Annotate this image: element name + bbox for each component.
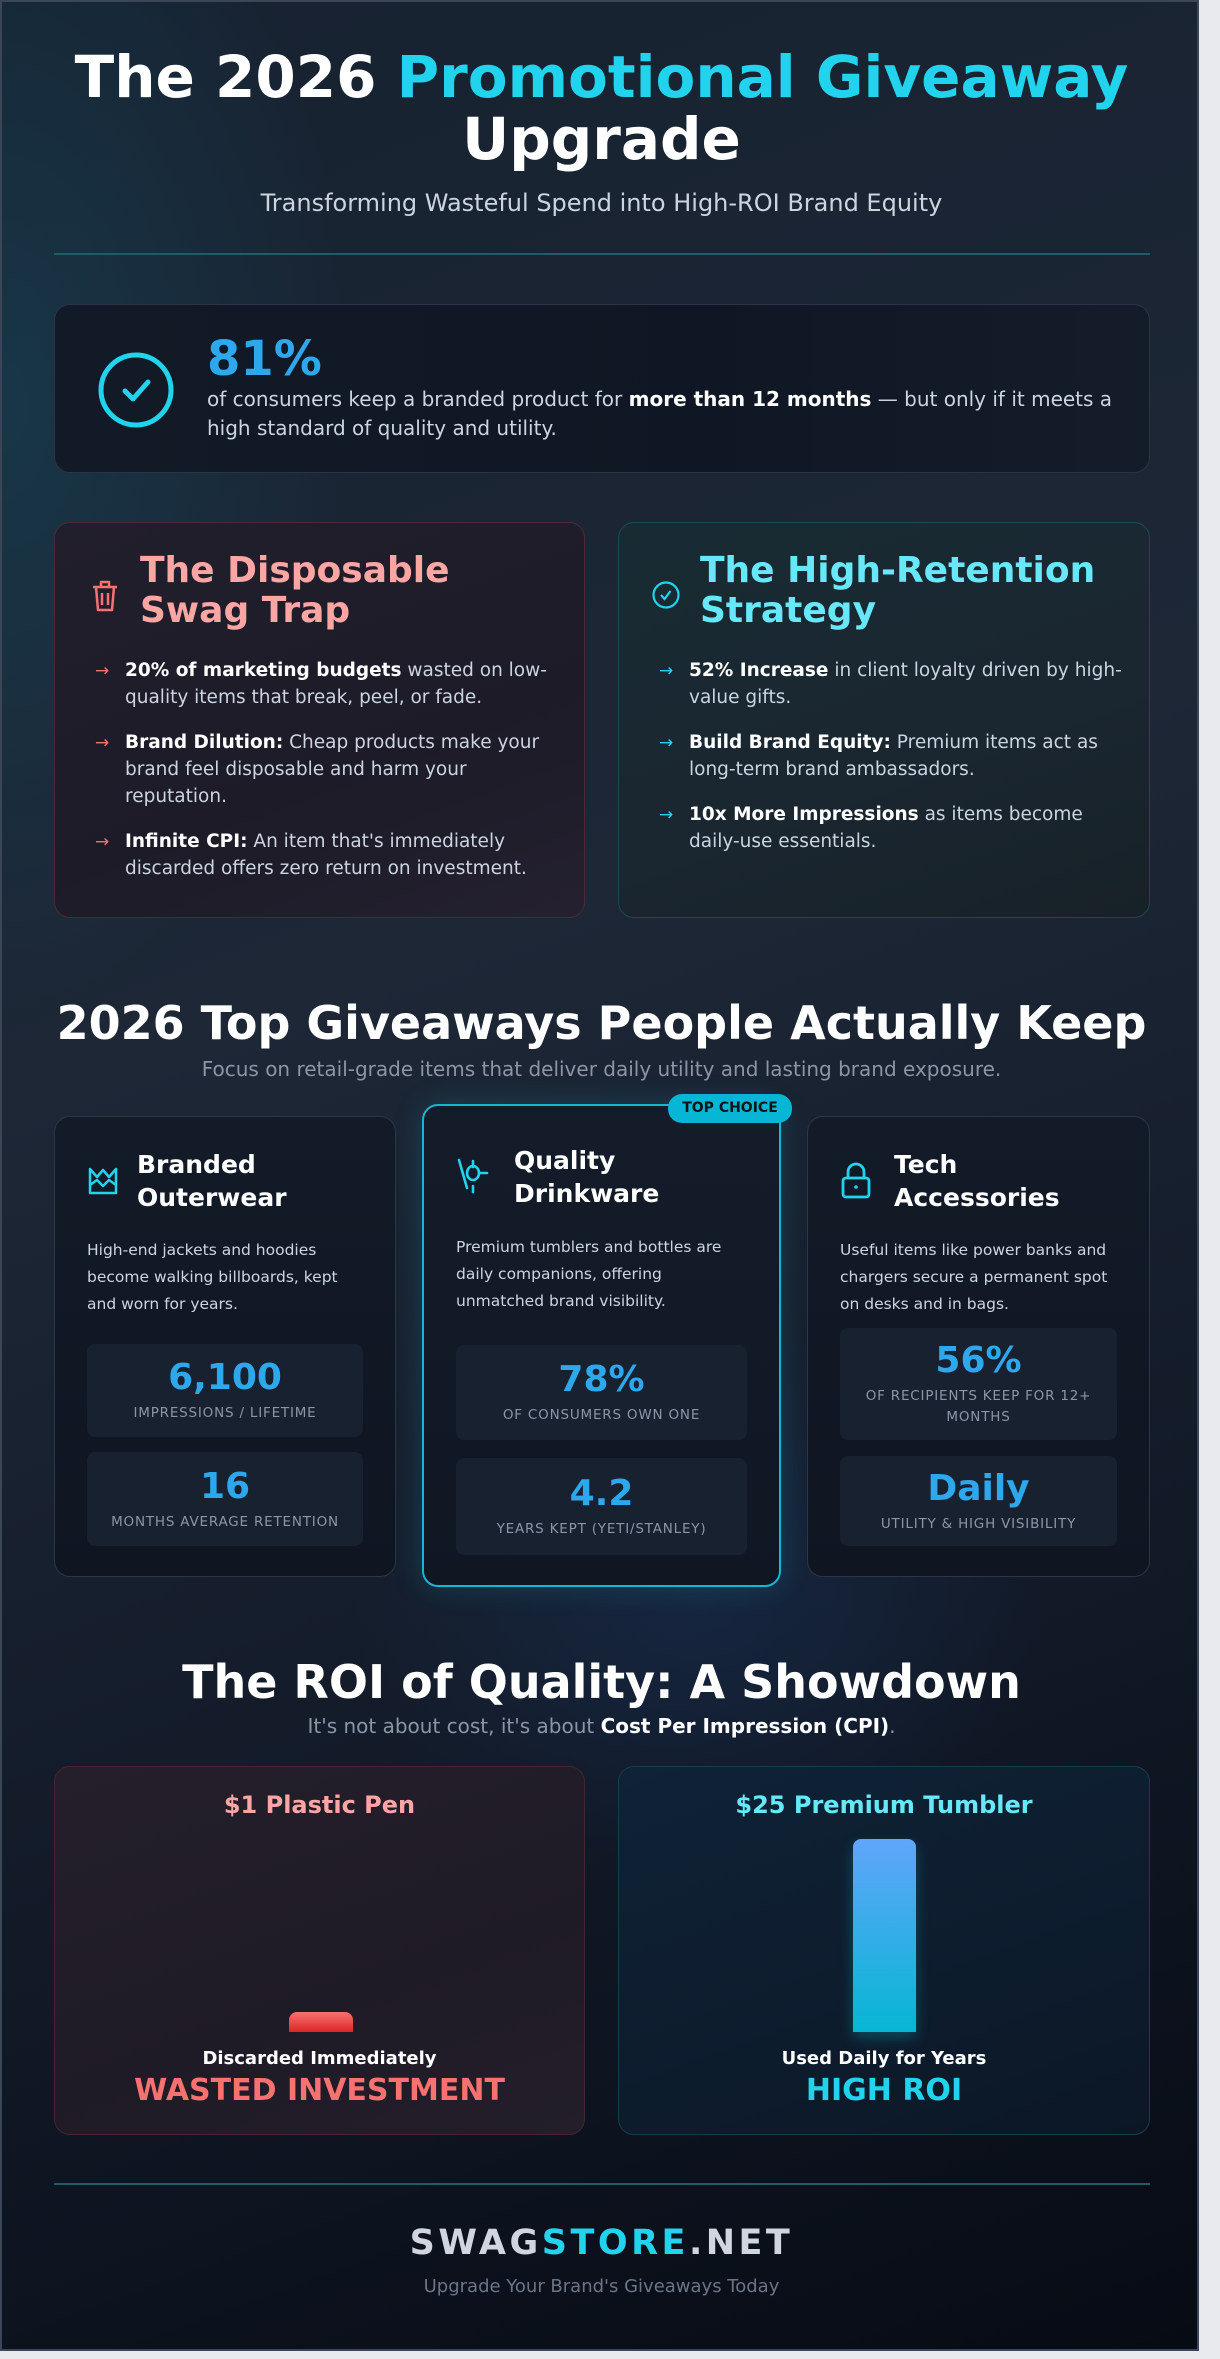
bullet 1: 52% Increase in client loyalty driven by high-value gifts. xyxy=(689,660,1122,708)
stat: 16 xyxy=(87,1452,363,1546)
stat: 56%: 56% xyxy=(935,1340,1022,1381)
bullet 3: → xyxy=(95,832,109,852)
bar: pen xyxy=(289,2012,353,2032)
stat: daily: Daily xyxy=(927,1468,1030,1508)
stat: 16: 16 xyxy=(200,1466,250,1506)
stat: daily xyxy=(840,1456,1117,1546)
stat: 78%: 78% xyxy=(558,1359,645,1400)
title: The 2026 Promotional Giveaway xyxy=(75,43,1128,111)
bullet 1: → xyxy=(659,661,673,681)
footer tagline: Upgrade Your Brand's Giveaways Today xyxy=(424,2276,779,2297)
title xyxy=(74,43,1128,173)
card header xyxy=(458,1146,659,1208)
stat: 78%: OF CONSUMERS OWN ONE xyxy=(503,1407,700,1423)
section heading: ROI showdown: The ROI of Quality: A Showdown xyxy=(182,1655,1021,1709)
heading: The High-Retention xyxy=(700,550,1095,591)
card: tech accessories xyxy=(807,1116,1150,1577)
heading xyxy=(700,550,1095,631)
panel: disposable swag trap xyxy=(54,522,585,918)
bullet 2: → xyxy=(659,733,673,753)
panel title: $1 Plastic Pen xyxy=(224,1791,415,1819)
heading: Swag Trap xyxy=(140,590,350,631)
stat number: 81% xyxy=(207,331,322,387)
bullet 3: Infinite CPI: An item that's immediately discarded offers zero return on investment. xyxy=(125,831,527,879)
heading: The Disposable xyxy=(140,550,450,591)
stat: daily: UTILITY & HIGH VISIBILITY xyxy=(881,1516,1076,1532)
card header: Accessories xyxy=(894,1183,1060,1212)
section subtitle: Focus on retail-grade items that deliver daily utility and lasting brand exposure. xyxy=(202,1057,1001,1081)
stat: 56%: OF RECIPIENTS KEEP FOR 12+ xyxy=(866,1388,1091,1404)
bullet 2: → xyxy=(95,733,109,753)
heading: Strategy xyxy=(700,590,876,631)
stat: 4.2 xyxy=(456,1458,747,1555)
title: Upgrade xyxy=(462,105,741,173)
bullet 1: 20% of marketing budgets wasted on low-quality items that break, peel, or fade. xyxy=(125,660,547,708)
label: Discarded Immediately xyxy=(202,2048,437,2069)
card header xyxy=(842,1150,1060,1212)
card description: Premium tumblers and bottles are daily companions, offering unmatched brand visibility. xyxy=(456,1238,721,1310)
card header: Branded xyxy=(137,1150,256,1179)
card: branded outerwear xyxy=(54,1116,396,1577)
panel title: $25 Premium Tumbler xyxy=(735,1791,1033,1819)
panel: high-retention strategy xyxy=(618,522,1150,918)
panel: premium tumbler xyxy=(618,1766,1150,2135)
card header: Outerwear xyxy=(137,1183,287,1212)
bullet 2: Build Brand Equity: Premium items act as long-term brand ambassadors. xyxy=(689,732,1098,780)
icon: check xyxy=(652,581,680,609)
stat: 16: MONTHS AVERAGE RETENTION xyxy=(111,1514,339,1530)
card header: Tech xyxy=(894,1150,957,1179)
heading xyxy=(140,550,450,631)
subtitle: Transforming Wasteful Spend into High-ROI Brand Equity xyxy=(261,189,942,217)
panel: plastic pen xyxy=(54,1766,585,2135)
icon: check circle xyxy=(98,352,174,428)
verdict: HIGH ROI xyxy=(806,2073,962,2108)
bullet 1: → xyxy=(95,661,109,681)
stat: 6,100: IMPRESSIONS / LIFETIME xyxy=(133,1405,317,1421)
bullet 3: 10x More Impressions as items become daily-use essentials. xyxy=(689,804,1083,852)
section heading: top giveaways: 2026 Top Giveaways People Actually Keep xyxy=(57,996,1146,1050)
stat: 6,100: 6,100 xyxy=(168,1357,282,1398)
card header: Drinkware xyxy=(514,1179,659,1208)
card description: Useful items like power banks and chargers secure a permanent spot on desks and in bags. xyxy=(840,1241,1107,1313)
label: Used Daily for Years xyxy=(782,2048,986,2069)
icon: trash xyxy=(93,580,117,612)
bar: tumbler xyxy=(853,1839,916,2032)
card description: High-end jackets and hoodies become walking billboards, kept and worn for years. xyxy=(87,1241,338,1313)
card header: Quality xyxy=(514,1146,615,1175)
stat: 56%: MONTHS xyxy=(946,1409,1011,1425)
badge: top choice: TOP CHOICE xyxy=(682,1100,778,1116)
stat: 6,100 xyxy=(87,1344,363,1437)
footer brand: SWAGSTORE.NET xyxy=(410,2223,793,2263)
stat: 78% xyxy=(456,1345,747,1440)
stat banner: 81% xyxy=(54,304,1150,473)
bullet 2: Brand Dilution: Cheap products make your brand feel disposable and harm your reputation. xyxy=(125,732,539,807)
badge: top choice xyxy=(668,1094,792,1123)
bullet 3: → xyxy=(659,805,673,825)
verdict: WASTED INVESTMENT xyxy=(134,2073,505,2108)
stat: 4.2: YEARS KEPT (YETI/STANLEY) xyxy=(497,1521,706,1537)
stat text: of consumers keep a branded product for more than 12 months — but only if it meets a high standard of quality and utility. xyxy=(207,387,1112,440)
card: quality drinkware (top choice) xyxy=(422,1104,781,1587)
stat: 4.2: 4.2 xyxy=(570,1473,633,1514)
section subtitle: It's not about cost, it's about Cost Per Impression (CPI). xyxy=(307,1714,896,1738)
stat: 56% xyxy=(840,1328,1117,1440)
card header xyxy=(88,1150,287,1212)
